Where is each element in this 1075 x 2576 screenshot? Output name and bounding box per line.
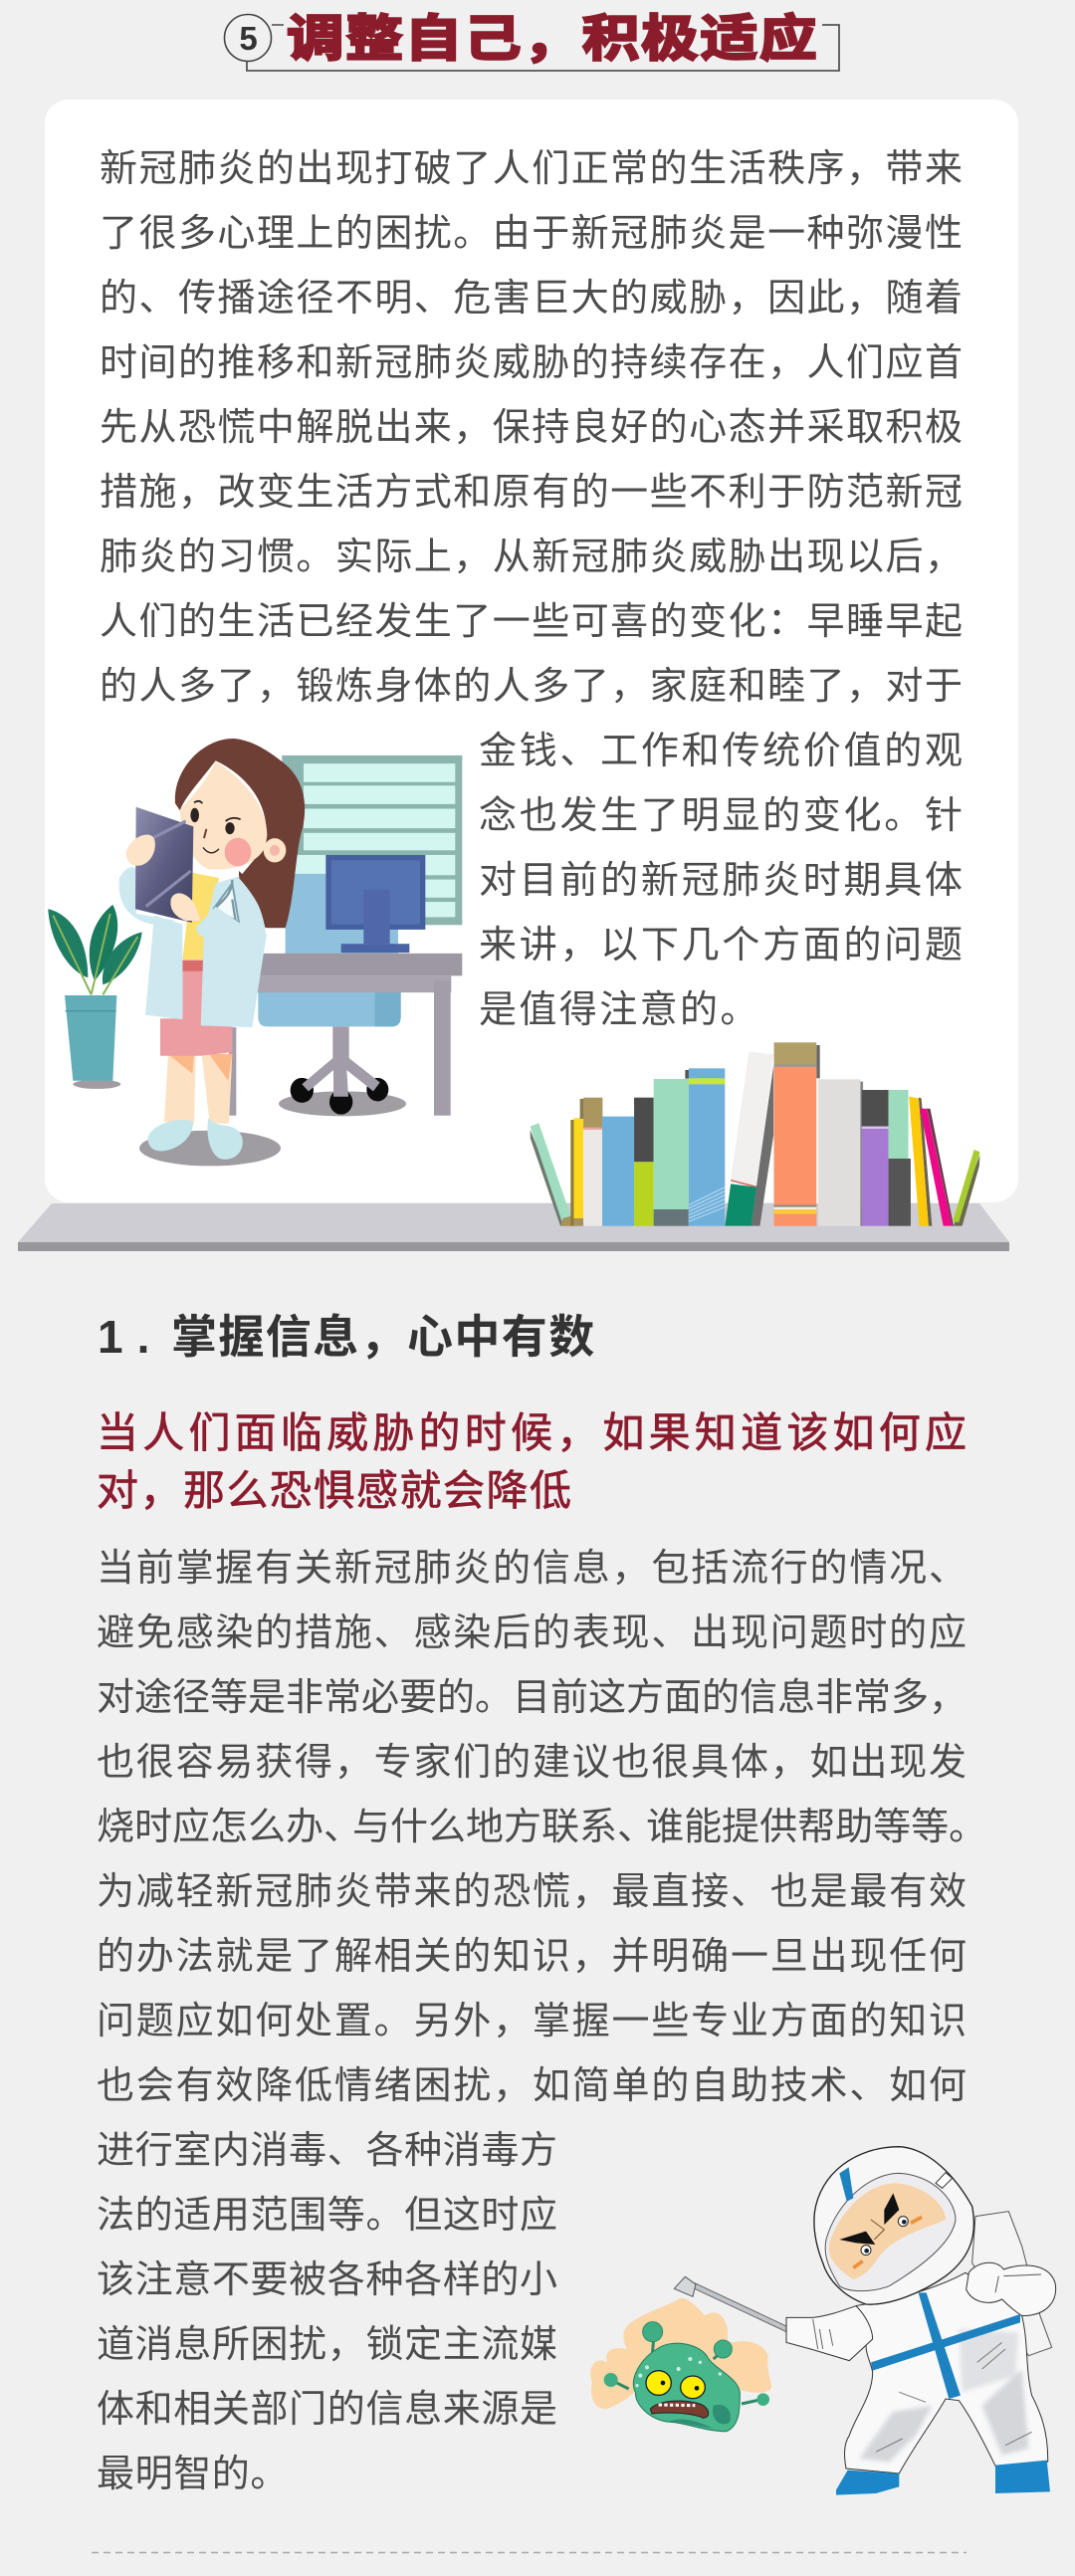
heading: section 1: 掌握信息，心中有数 bbox=[171, 1311, 596, 1363]
text block: intro paragraph: 是值得注意的。 bbox=[479, 989, 760, 1031]
visor rim bbox=[825, 2173, 956, 2291]
text block: intro paragraph: 对目前的新冠肺炎时期具体 bbox=[479, 860, 963, 902]
backpack bbox=[972, 2212, 1052, 2356]
red subheading bbox=[97, 1409, 967, 1514]
title number: 5 bbox=[239, 20, 258, 57]
text block: section 1 body: 当前掌握有关新冠肺炎的信息，包括流行的情况、 bbox=[97, 1548, 967, 1590]
shelf bbox=[18, 1203, 1009, 1251]
text block: intro paragraph bbox=[100, 148, 963, 1031]
boots bbox=[836, 2461, 1050, 2495]
text block: section 1 body: 体和相关部门的信息来源是 bbox=[97, 2389, 557, 2431]
helmet strap bbox=[936, 2173, 953, 2188]
text block: section 1 body: 该注意不要被各种各样的小 bbox=[97, 2259, 557, 2301]
text block: section 1 body: 对途径等是非常必要的。目前这方面的信息非常多， bbox=[97, 1677, 967, 1719]
window blinds bbox=[282, 755, 462, 925]
angry face bbox=[829, 2183, 946, 2279]
text block: intro paragraph: 来讲，以下几个方面的问题 bbox=[479, 925, 963, 966]
virus character bbox=[604, 2322, 769, 2432]
dashed divider bbox=[92, 2552, 967, 2554]
text block: intro paragraph: 的、传播途径不明、危害巨大的威胁，因此，随着 bbox=[100, 278, 963, 320]
text block: intro paragraph: 了很多心理上的困扰。由于新冠肺炎是一种弥漫性 bbox=[100, 213, 963, 255]
text block: section 1 body bbox=[97, 1548, 986, 2495]
left arm and glove bbox=[786, 2306, 873, 2361]
text block: section 1 body: 道消息所困扰，锁定主流媒 bbox=[97, 2324, 557, 2366]
desk bbox=[229, 954, 462, 1116]
office chair bbox=[258, 874, 406, 1116]
text block: section 1 body: 烧时应怎么办、与什么地方联系、谁能提供帮助等等。 bbox=[97, 1807, 986, 1848]
blue helmet stripe bbox=[839, 2167, 853, 2202]
text block: intro paragraph: 的人多了，锻炼身体的人多了，家庭和睦了，对于 bbox=[100, 666, 963, 708]
text block: section 1 body: 避免感染的措施、感染后的表现、出现问题时的应 bbox=[97, 1612, 967, 1654]
heading: section 1: 1. bbox=[98, 1311, 163, 1363]
text block: intro paragraph: 新冠肺炎的出现打破了人们正常的生活秩序，带来 bbox=[100, 148, 963, 190]
computer monitor bbox=[325, 855, 425, 953]
doctor character bbox=[119, 739, 305, 1166]
red subheading: 当人们面临威胁的时候，如果知道该如何应 bbox=[97, 1409, 967, 1456]
protective suit bbox=[823, 2130, 1048, 2473]
text block: section 1 body: 最明智的。 bbox=[97, 2454, 289, 2495]
spray wand bbox=[674, 2276, 790, 2331]
panel: white intro card bbox=[45, 100, 1018, 1202]
red subheading: 对，那么恐惧感就会降低 bbox=[97, 1467, 573, 1514]
text block: section 1 body: 法的适用范围等。但这时应 bbox=[97, 2195, 557, 2237]
text block: intro paragraph: 措施，改变生活方式和原有的一些不利于防范新冠 bbox=[100, 472, 963, 514]
helmet bbox=[814, 2147, 973, 2304]
text block: section 1 body: 的办法就是了解相关的知识，并明确一旦出现任何 bbox=[97, 1936, 967, 1978]
blue cross tape bbox=[871, 2257, 1020, 2399]
illustration: doctor, plant and desk bbox=[48, 739, 462, 1166]
text block: intro paragraph: 时间的推移和新冠肺炎威胁的持续存在，人们应首 bbox=[100, 342, 963, 384]
text block: intro paragraph: 念也发生了明显的变化。针 bbox=[479, 795, 963, 837]
disinfectant spray cloud bbox=[590, 2297, 771, 2409]
illustration: row of books bbox=[531, 1042, 980, 1226]
text block: section 1 body: 也很容易获得，专家们的建议也很具体，如出现发 bbox=[97, 1742, 967, 1784]
text block: section 1 body: 进行室内消毒、各种消毒方 bbox=[97, 2130, 557, 2172]
title frame with number badge bbox=[225, 14, 839, 71]
text block: intro paragraph: 肺炎的习惯。实际上，从新冠肺炎威胁出现以后， bbox=[100, 537, 963, 578]
text block: section 1 body: 为减轻新冠肺炎带来的恐慌，最直接、也是最有效 bbox=[97, 1871, 967, 1913]
text block: section 1 body: 问题应如何处置。另外，掌握一些专业方面的知识 bbox=[97, 2001, 967, 2042]
text block: intro paragraph: 先从恐慌中解脱出来，保持良好的心态并采取积极 bbox=[100, 407, 963, 449]
potted plant bbox=[48, 905, 142, 1089]
text block: intro paragraph: 人们的生活已经发生了一些可喜的变化：早睡早起 bbox=[100, 601, 963, 643]
text block: section 1 body: 也会有效降低情绪困扰，如简单的自助技术、如何 bbox=[97, 2065, 967, 2107]
right arm and fist bbox=[967, 2262, 1056, 2316]
illustration: hazmat worker spraying virus bbox=[590, 2130, 1056, 2495]
title: 调整自己，积极适应 bbox=[287, 11, 816, 67]
text block: intro paragraph: 金钱、工作和传统价值的观 bbox=[479, 731, 963, 772]
